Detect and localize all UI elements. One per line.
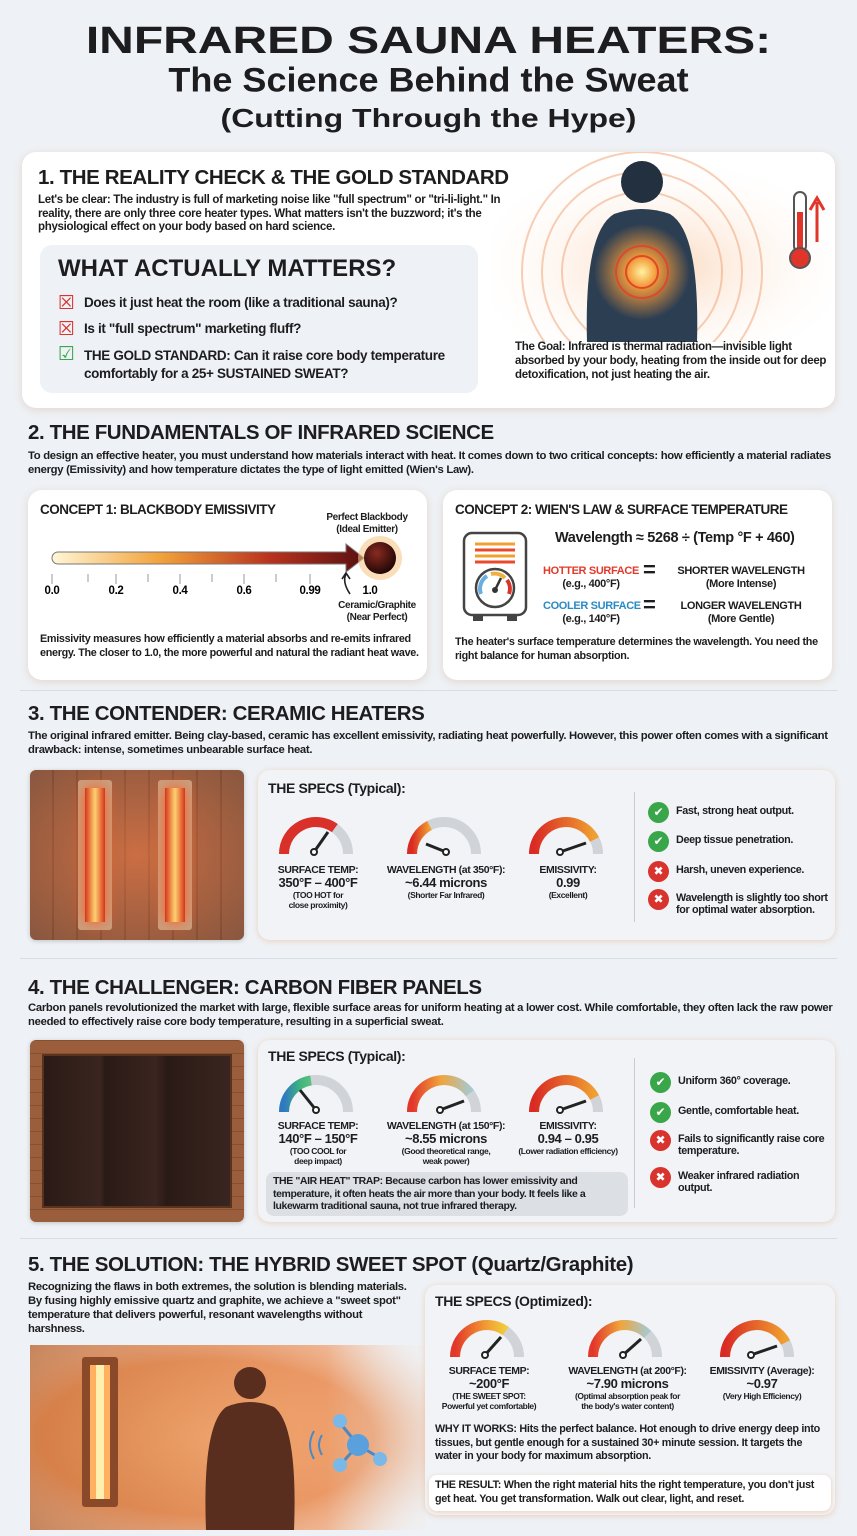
gauge: wavelength (588, 1320, 662, 1359)
label: surface temp: deep impact) (294, 1156, 342, 1166)
hotter row: SHORTER WAVELENGTH (677, 565, 805, 577)
gauge: wavelength (407, 1075, 481, 1114)
hotter row: (e.g., 400°F) (562, 578, 620, 590)
label: ceramic graphite (338, 600, 416, 623)
gauge: emissivity (529, 817, 603, 856)
pros and cons list (648, 802, 828, 916)
item 1 (58, 292, 397, 314)
item 2 (58, 318, 301, 340)
panel: ceramic specs (258, 770, 835, 940)
pros and cons list: Uniform 360° coverage. (678, 1075, 790, 1087)
heading 5: 5. THE SOLUTION: THE HYBRID SWEET SPOT (Quartz/Graphite) (28, 1253, 633, 1276)
title: (Cutting Through the Hype) (221, 103, 636, 133)
cooler row: (More Gentle) (708, 613, 774, 625)
label: emissivity: EMISSIVITY: (539, 1120, 597, 1132)
label: wavelength: ~6.44 microns (405, 875, 487, 890)
pros and cons list: Fast, strong heat output. (676, 805, 794, 817)
panel: carbon specs (258, 1040, 835, 1222)
emissivity scale: 1.0 (363, 585, 377, 597)
image: ceramic heaters (30, 770, 244, 940)
item 3 gold standard: THE GOLD STANDARD: Can it raise core body temperature comfortably for a 25+ SUSTAINED SWEAT? (84, 348, 445, 381)
item 1: Does it just heat the room (like a traditional sauna)? (84, 295, 397, 310)
specs heading: THE SPECS (Optimized): (435, 1293, 592, 1309)
label: surface temp: ~200°F (469, 1376, 509, 1391)
gauge: emissivity (720, 1320, 794, 1359)
label: wavelength: (Shorter Far Infrared) (408, 890, 484, 900)
pros and cons list: Fails to significantly raise core temperature. (678, 1133, 824, 1157)
pros and cons list: ✔ (655, 1075, 666, 1089)
gauge: emissivity (529, 1075, 603, 1114)
image: carbon panels (30, 1040, 244, 1222)
label: wavelength: ~7.90 microns (587, 1376, 668, 1391)
concept 2 heading: CONCEPT 2: WIEN'S LAW & SURFACE TEMPERATURE (455, 502, 787, 517)
formula: Wavelength ≈ 5268 ÷ (Temp °F + 460) (555, 530, 795, 546)
label: surface temp (278, 864, 358, 910)
gauge: surface temp (279, 817, 353, 856)
panel: concept 2 (443, 490, 832, 680)
emissivity scale (44, 536, 402, 597)
label: surface temp (278, 1120, 358, 1166)
cooler row: (e.g., 140°F) (562, 613, 620, 625)
label: wavelength: (Good theoretical range, (402, 1146, 490, 1156)
label: ceramic graphite: Ceramic/Graphite (338, 600, 416, 611)
pros and cons list: ✖ (653, 864, 664, 878)
label: wavelength (568, 1365, 687, 1411)
section 3 intro: The original infrared emitter. Being clay-based, ceramic has excellent emissivity, radiating heat powerfully. However, this power often comes with a significant drawback: intense, sometimes unbearable surface heat. (28, 730, 828, 756)
label: surface temp: SURFACE TEMP: (449, 1365, 529, 1377)
label: wavelength: (Optimal absorption peak for (575, 1391, 680, 1401)
heading 3: 3. THE CONTENDER: CERAMIC HEATERS (28, 702, 424, 725)
title (86, 20, 771, 133)
gauge: wavelength (407, 817, 481, 856)
label: surface temp: (TOO HOT for (293, 890, 343, 900)
label: ceramic graphite: (Near Perfect) (347, 612, 407, 623)
hotter row: (More Intense) (706, 578, 776, 590)
callout: air heat trap: THE "AIR HEAT" TRAP: Because carbon has lower emissivity and temperature, it often heats the air more than your body. It feels like a lukewarm traditional sauna, not true infrared therapy. (273, 1175, 585, 1212)
label: emissivity: EMISSIVITY (Average): (710, 1365, 814, 1377)
label: wavelength: WAVELENGTH (at 200°F): (568, 1365, 687, 1377)
label: emissivity: ~0.97 (747, 1376, 777, 1391)
hotter row (543, 557, 805, 590)
label: emissivity: 0.94 – 0.95 (538, 1131, 598, 1146)
panel: concept 1 (28, 490, 427, 680)
pros and cons list: Deep tissue penetration. (676, 834, 793, 846)
illustration: body with heat (521, 152, 826, 342)
cooler row: LONGER WAVELENGTH (681, 600, 801, 612)
emissivity scale: 0.6 (237, 585, 251, 597)
cooler row: = (643, 592, 656, 617)
item 3 gold standard: ☑ (58, 343, 75, 365)
label: surface temp: SURFACE TEMP: (278, 1120, 358, 1132)
label: surface temp: (TOO COOL for (290, 1146, 346, 1156)
box heading: WHAT ACTUALLY MATTERS? (58, 255, 396, 282)
pros and cons list: ✔ (653, 834, 664, 848)
label: wavelength (386, 864, 505, 900)
label: emissivity (518, 1120, 618, 1156)
label: emissivity (710, 1365, 814, 1401)
pros and cons list: Wavelength is slightly too short for optimal water absorption. (676, 892, 828, 916)
item 2: ☒ (58, 318, 75, 340)
label: wavelength: WAVELENGTH (at 150°F): (387, 1120, 505, 1132)
label: surface temp (442, 1365, 536, 1411)
label: wavelength: the body's water content) (581, 1401, 674, 1411)
label: surface temp: Powerful yet comfortable) (442, 1401, 536, 1411)
concept 1 text: Emissivity measures how efficiently a material absorbs and re-emits infrared energy. The closer to 1.0, the more powerful and natural the radiant heat wave. (40, 633, 419, 658)
image: hybrid heater with person and molecule (30, 1345, 425, 1530)
icon: heater with dial (462, 532, 528, 621)
label: surface temp: SURFACE TEMP: (278, 864, 358, 876)
panel: hybrid specs (425, 1285, 835, 1515)
cooler row (543, 592, 802, 625)
label: emissivity: 0.99 (556, 875, 580, 890)
section 5 intro: Recognizing the flaws in both extremes, the solution is blending materials. By fusing highly emissive quartz and graphite, we achieve a "sweet spot" temperature that delivers powerful, resonant wavelengths without harshness. (28, 1281, 407, 1335)
icon: thermometer (790, 192, 824, 268)
hotter row: HOTTER SURFACE (543, 565, 639, 577)
caption: the goal: The Goal: Infrared is thermal radiation—invisible light absorbed by your body, heating from the inside out for deep detoxification, not just heating the air. (515, 341, 826, 381)
item 2: Is it "full spectrum" marketing fluff? (84, 321, 301, 336)
pros and cons list: Weaker infrared radiation output. (678, 1170, 799, 1194)
label: emissivity: EMISSIVITY: (539, 864, 597, 876)
section 4 intro: Carbon panels revolutionized the market with large, flexible surface areas for uniform heating at a lower cost. While comfortable, they often lack the raw power needed to effectively raise core body temperature, resulting in a superficial sweat. (28, 1002, 832, 1028)
label: surface temp: (THE SWEET SPOT: (452, 1391, 526, 1401)
emissivity scale: 0.99 (300, 585, 320, 597)
label: wavelength (386, 1120, 505, 1166)
label: wavelength: weak power) (423, 1156, 469, 1166)
box: what actually matters (40, 245, 478, 393)
item 1: ☒ (58, 292, 75, 314)
label: perfect blackbody (326, 512, 408, 535)
emissivity scale: 0.4 (173, 585, 188, 597)
cooler row: COOLER SURFACE (543, 600, 641, 612)
callout: the result: THE RESULT: When the right material hits the right temperature, you don't just get heat. You get transformation. Walk out clear, light, and reset. (435, 1479, 814, 1504)
concept 1 heading: CONCEPT 1: BLACKBODY EMISSIVITY (40, 502, 276, 517)
pros and cons list: ✔ (655, 1105, 666, 1119)
pros and cons list: Gentle, comfortable heat. (678, 1105, 799, 1117)
gauge: surface temp (279, 1075, 353, 1114)
pros and cons list (650, 1072, 824, 1194)
intro text: Let's be clear: The industry is full of marketing noise like "full spectrum" or "tri-li-light." In reality, there are only three core heater types. What matters isn't the buzzword; it's the physiological effect on your body based on hard science. (38, 194, 500, 233)
pros and cons list: ✖ (653, 892, 664, 906)
section 2 intro: To design an effective heater, you must understand how materials interact with heat. It comes down to two critical concepts: how efficiently a material radiates energy (Emissivity) and how temperature dictates the type of light emitted (Wien's Law). (28, 450, 831, 476)
emissivity scale: 0.2 (109, 585, 123, 597)
label: perfect blackbody: Perfect Blackbody (326, 512, 408, 523)
label: emissivity: (Very High Efficiency) (723, 1391, 801, 1401)
panel: section 1 (22, 152, 835, 408)
label: emissivity (539, 864, 597, 900)
pros and cons list: ✔ (653, 805, 664, 819)
heading 1: 1. THE REALITY CHECK & THE GOLD STANDARD (38, 166, 509, 189)
pros and cons list: Harsh, uneven experience. (676, 864, 804, 876)
why it works: WHY IT WORKS: Hits the perfect balance. Hot enough to drive energy deep into tissues, but gentle enough for a sustained 30+ minute session. It targets the water in your body for maximum absorption. (435, 1423, 820, 1462)
callout: the result (429, 1475, 831, 1511)
heading 4: 4. THE CHALLENGER: CARBON FIBER PANELS (28, 976, 482, 999)
emissivity scale: 0.0 (45, 585, 59, 597)
label: surface temp: 140°F – 150°F (279, 1131, 357, 1146)
pros and cons list: ✖ (655, 1133, 666, 1147)
heading 2: 2. THE FUNDAMENTALS OF INFRARED SCIENCE (28, 421, 494, 444)
label: surface temp: 350°F – 400°F (279, 875, 357, 890)
label: emissivity: (Lower radiation efficiency) (518, 1146, 618, 1156)
title: The Science Behind the Sweat (168, 60, 689, 99)
label: perfect blackbody: (Ideal Emitter) (336, 524, 398, 535)
concept 2 text: The heater's surface temperature determines the wavelength. You need the right balance for human absorption. (455, 636, 818, 662)
label: emissivity: (Excellent) (549, 890, 587, 900)
gauge: surface temp (450, 1320, 524, 1359)
label: surface temp: close proximity) (289, 900, 347, 910)
label: wavelength: ~8.55 microns (405, 1131, 487, 1146)
specs heading: THE SPECS (Typical): (268, 780, 405, 796)
hotter row: = (643, 557, 656, 582)
title: INFRARED SAUNA HEATERS: (86, 20, 771, 62)
label: wavelength: WAVELENGTH (at 350°F): (387, 864, 505, 876)
pros and cons list: ✖ (655, 1170, 666, 1184)
specs heading: THE SPECS (Typical): (268, 1048, 405, 1064)
